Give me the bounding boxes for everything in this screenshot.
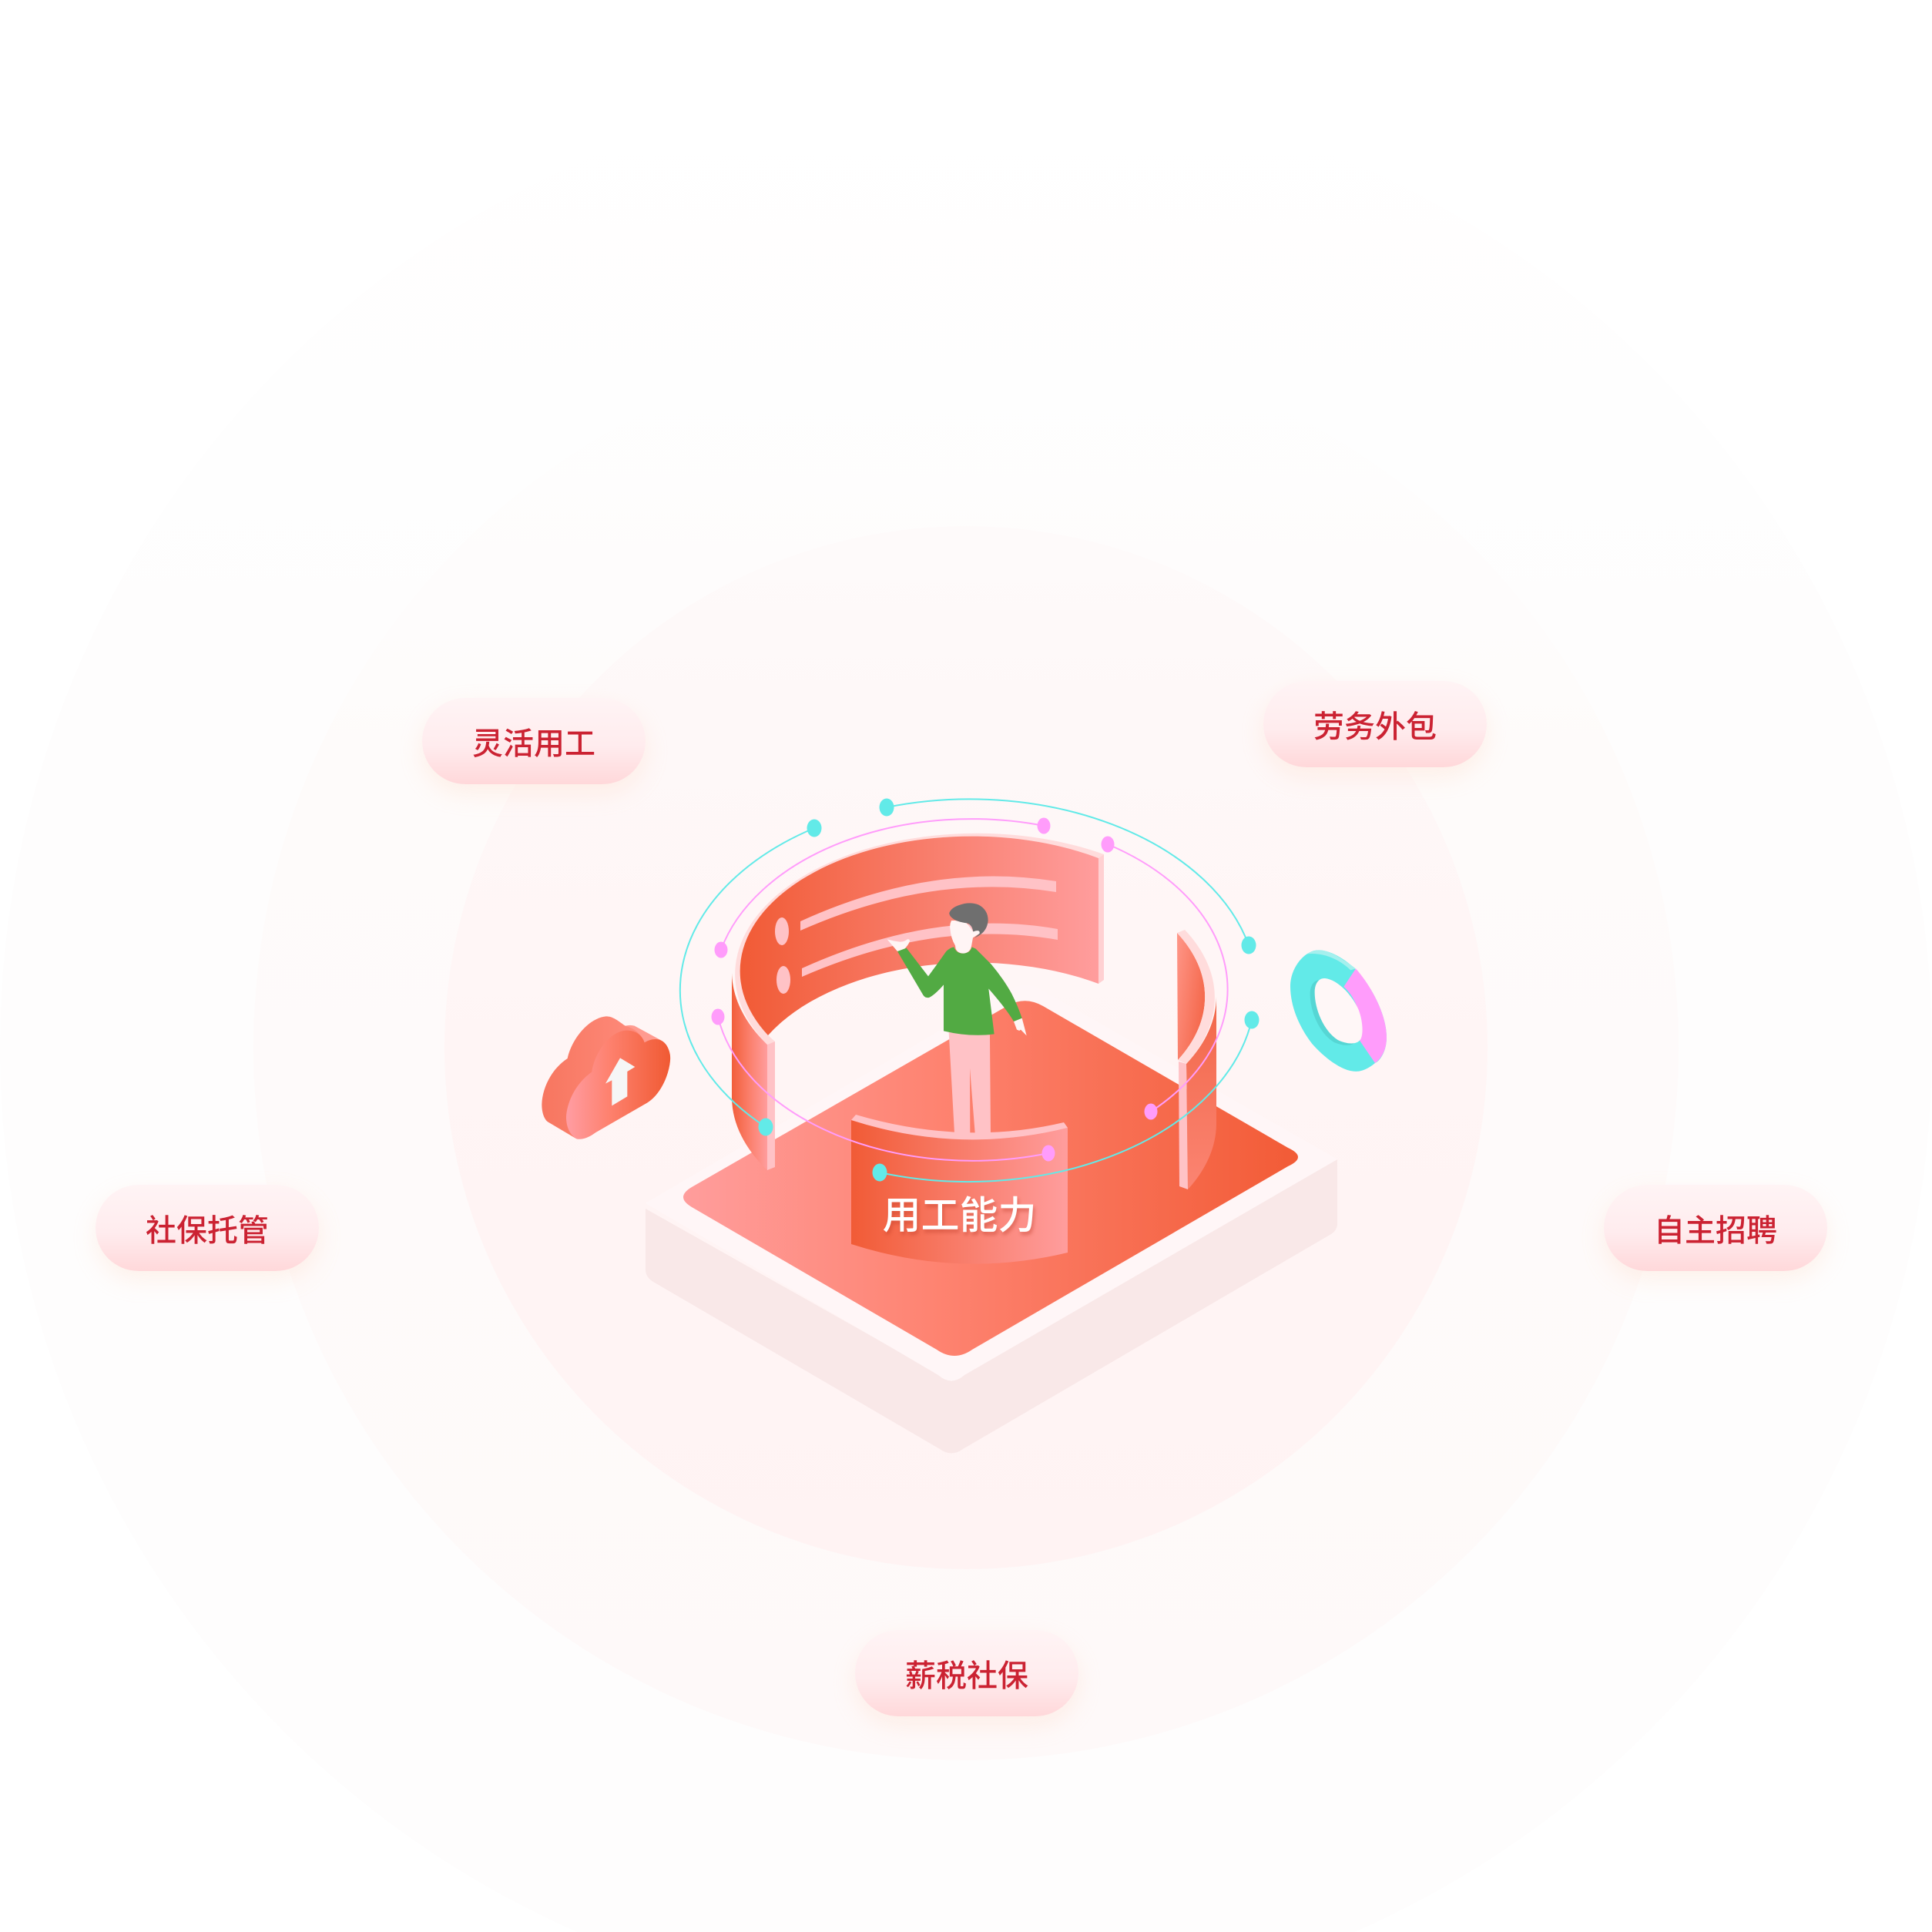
face and neck — [950, 921, 980, 954]
left hand — [887, 939, 910, 951]
pill: flexible employment — [422, 698, 646, 784]
right curved wall — [1177, 930, 1216, 1189]
pill: labour outsourcing — [1263, 681, 1487, 767]
red diamond floor — [683, 1001, 1298, 1356]
right hand — [1014, 1018, 1027, 1035]
trousers — [949, 1032, 991, 1133]
pill: payroll tax and social security — [855, 1630, 1078, 1716]
platform base slab — [646, 1159, 1337, 1453]
screen line two — [802, 924, 1058, 977]
orbit rings and nodes — [680, 798, 1259, 1182]
hair — [949, 903, 988, 938]
pill: independent recruitment: 自主招聘 — [1654, 1214, 1777, 1248]
front curved wall — [851, 1115, 1068, 1264]
screen line one — [800, 877, 1056, 931]
pill: payroll tax and social security: 薪税社保 — [905, 1659, 1028, 1693]
pill: social security custody — [96, 1185, 319, 1271]
back curved wall — [732, 834, 1104, 1170]
donut chart icon — [1290, 950, 1387, 1072]
centre caption: 用工能力 — [883, 1194, 1037, 1237]
sweater — [897, 947, 1022, 1035]
screen dot two — [776, 966, 790, 994]
person — [887, 903, 1027, 1133]
screen dot one — [775, 917, 789, 945]
pill: independent recruitment — [1604, 1185, 1827, 1271]
pill: labour outsourcing: 劳务外包 — [1313, 710, 1437, 744]
platform top plate — [646, 984, 1337, 1380]
pill: flexible employment: 灵活用工 — [472, 727, 595, 761]
cloud upload icon — [542, 1016, 670, 1139]
pill: social security custody: 社保托管 — [146, 1214, 269, 1248]
